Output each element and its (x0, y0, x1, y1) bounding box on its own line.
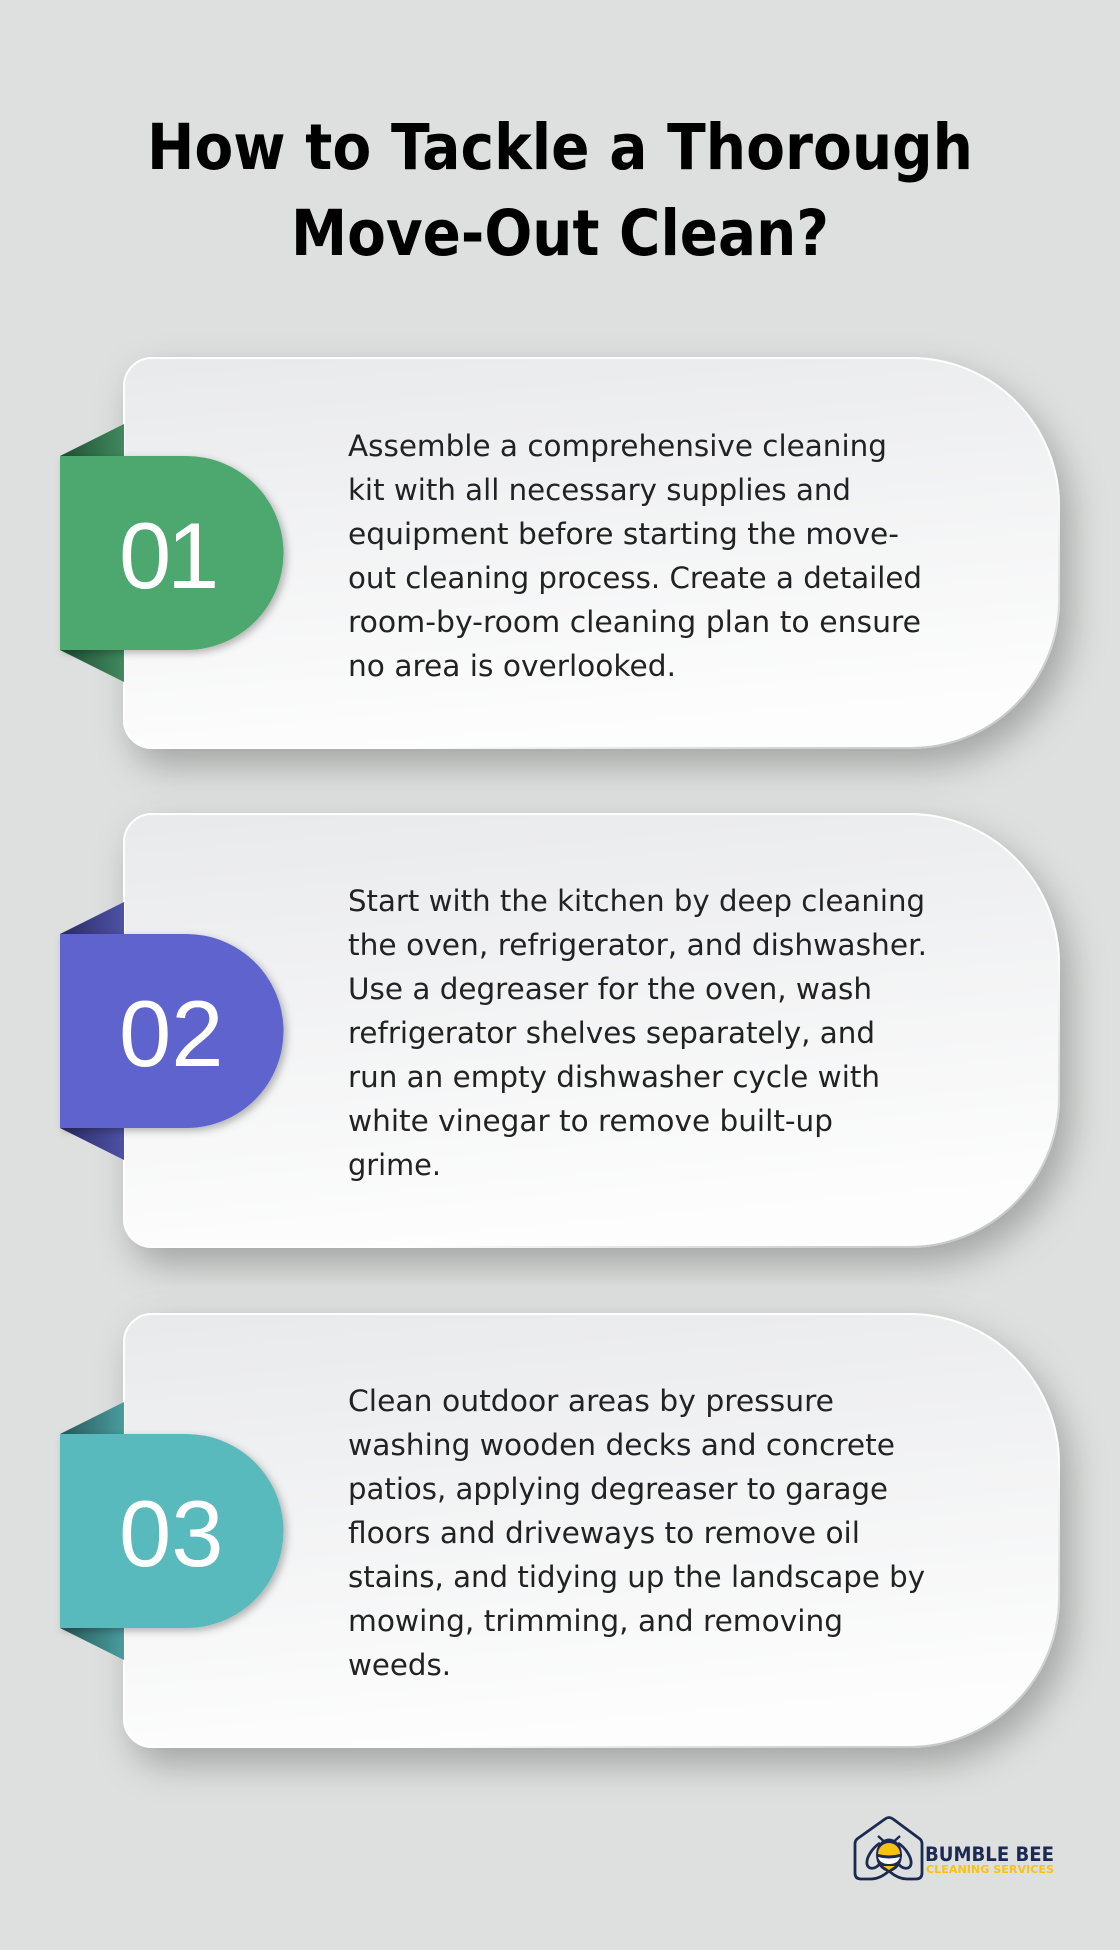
number 01: 01 (119, 503, 219, 608)
step 2 text (348, 884, 927, 1182)
step 2 text: Start with the kitchen by deep cleaning (348, 884, 925, 918)
card 3 background (124, 1314, 1059, 1747)
title: Move-Out Clean? (291, 197, 829, 270)
card 2 background (124, 814, 1059, 1247)
ribbon folds, step 2 (60, 902, 124, 1160)
step 1 text: Assemble a comprehensive cleaning (348, 429, 887, 463)
step 2 text: the oven, refrigerator, and dishwasher. (348, 928, 927, 962)
panel: step 2 (60, 814, 1059, 1247)
step 3 text: weeds. (348, 1648, 451, 1682)
step 2 text: white vinegar to remove built-up (348, 1104, 833, 1138)
step 2 text: run an empty dishwasher cycle with (348, 1060, 880, 1094)
number tab 02 (60, 934, 284, 1128)
panel: step 3 (60, 1314, 1059, 1747)
step 3 text: stains, and tidying up the landscape by (348, 1560, 925, 1594)
logo tagline: CLEANING SERVICES (926, 1863, 1054, 1876)
ribbon folds, step 1 (60, 424, 124, 682)
number 03: 03 (119, 1481, 224, 1586)
logo: Bumble Bee Cleaning Services (855, 1818, 1054, 1879)
panel: step 1 (60, 358, 1059, 748)
step 3 text: mowing, trimming, and removing (348, 1604, 843, 1638)
number 02: 02 (119, 981, 224, 1086)
logo wordmark: BUMBLE BEE (925, 1843, 1054, 1866)
step 3 text: floors and driveways to remove oil (348, 1516, 860, 1550)
title: How to Tackle a Thorough (147, 111, 973, 184)
step 2 text: Use a degreaser for the oven, wash (348, 972, 872, 1006)
ribbon folds, step 3 (60, 1402, 124, 1660)
step 3 text: washing wooden decks and concrete (348, 1428, 895, 1462)
title (147, 111, 973, 270)
step 1 text: room-by-room cleaning plan to ensure (348, 605, 921, 639)
step 1 text: out cleaning process. Create a detailed (348, 561, 922, 595)
icon: house outline with bee (855, 1818, 922, 1879)
step 1 text: no area is overlooked. (348, 649, 676, 683)
step 3 text (348, 1384, 925, 1682)
number tab 03 (60, 1434, 283, 1628)
step 3 text: Clean outdoor areas by pressure (348, 1384, 834, 1418)
card 1 background (124, 358, 1059, 748)
number tab 01 (60, 456, 284, 650)
step 1 text (348, 429, 922, 683)
step 1 text: kit with all necessary supplies and (348, 473, 851, 507)
step 1 text: equipment before starting the move- (348, 517, 899, 551)
step 2 text: refrigerator shelves separately, and (348, 1016, 875, 1050)
step 3 text: patios, applying degreaser to garage (348, 1472, 888, 1506)
step 2 text: grime. (348, 1148, 441, 1182)
